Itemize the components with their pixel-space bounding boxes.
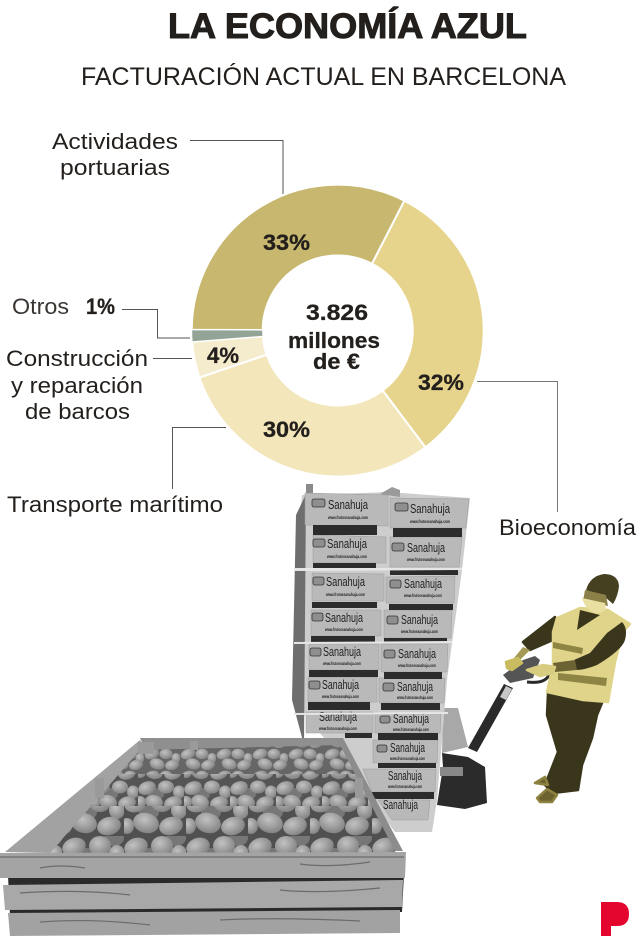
photo: stacked boxes: Sanahuja <box>404 576 443 591</box>
title: LA ECONOMÍA AZUL <box>168 6 527 46</box>
crate: corner posts <box>95 741 363 798</box>
photo: stacked boxes: www.frutossanahuja.com <box>396 695 433 700</box>
donut chart <box>192 185 484 477</box>
photo: stacked boxes: www.frutossanahuja.com <box>389 756 425 761</box>
crate: front plank top <box>0 852 406 878</box>
crate: right wall <box>336 738 403 851</box>
worker: left arm <box>523 617 555 650</box>
percentage labels <box>207 230 464 442</box>
photo: stacked boxes: Sanahuja <box>401 612 439 627</box>
photo: stacked boxes: www.frutossanahuja.com <box>397 663 436 668</box>
photo: wooden crate of potatoes <box>0 738 406 936</box>
photo: stacked boxes: Sanahuja <box>407 540 446 555</box>
worker: head <box>586 574 619 604</box>
photo: pallet truck <box>437 656 549 809</box>
percentage labels: 30% <box>263 417 310 442</box>
crate: front plank bottom <box>8 910 400 936</box>
worker: right arm <box>574 622 626 670</box>
segment: actividades portuarias 33% <box>192 185 404 330</box>
logo <box>601 902 629 936</box>
photo: stacked boxes: Sanahuja <box>325 610 364 625</box>
photo: stacked boxes: Sanahuja <box>326 574 366 589</box>
label: construcción y reparación de barcos: de barcos <box>25 399 130 424</box>
crate: wood marks <box>0 857 404 925</box>
worker: shoes <box>535 777 557 802</box>
donut centre total: de € <box>313 349 360 374</box>
photo: stacked boxes: www.frutossanahuja.com <box>322 661 361 666</box>
photo: stacked boxes: www.frutossanahuja.com <box>325 592 365 597</box>
label: actividades portuarias <box>52 129 178 180</box>
label: actividades portuarias: Actividades <box>52 129 178 154</box>
percentage labels: 33% <box>263 230 310 255</box>
segment: otros 1% <box>192 330 263 342</box>
worker: gloves <box>506 658 522 670</box>
label: otros: 1% <box>86 294 115 319</box>
photo: stacked boxes: www.frutossanahuja.com <box>392 727 429 732</box>
label: actividades portuarias: portuarias <box>60 155 170 180</box>
photo: stacked boxes: www.frutossanahuja.com <box>400 629 438 634</box>
crate: potatoes <box>50 744 400 854</box>
photo: stacked boxes: Sanahuja <box>388 768 422 783</box>
photo: stacked boxes: Sanahuja <box>410 501 451 516</box>
label: otros: Otros <box>12 294 69 319</box>
photo: stacked boxes: Sanahuja <box>393 711 429 726</box>
label: construcción y reparación de barcos <box>6 346 148 424</box>
label: construcción y reparación de barcos: y reparación <box>11 373 143 398</box>
crate: left wall <box>5 740 146 853</box>
segment: construcción 4% <box>192 336 267 378</box>
crate: inner back wall <box>140 738 346 751</box>
crate: dark gaps <box>8 874 404 916</box>
photo: stacked boxes: Sanahuja <box>328 497 369 512</box>
leader lines <box>122 140 558 512</box>
photo: stacked boxes: Sanahuja <box>383 797 418 812</box>
donut centre total: millones <box>288 328 380 353</box>
photo: stacked boxes: www.frutossanahuja.com <box>326 554 367 559</box>
photo: stacked boxes: Sanahuja <box>390 740 425 755</box>
photo: stacked boxes: Sanahuja <box>319 709 358 724</box>
photo: worker in high-visibility vest <box>506 574 630 802</box>
segment: transporte marítimo 30% <box>200 355 425 477</box>
label: bioeconomía: Bioeconomía <box>499 515 637 540</box>
photo: stacked boxes: www.frutossanahuja.com <box>403 593 442 598</box>
donut centre total: 3.826 <box>306 300 368 325</box>
label: otros <box>12 294 115 319</box>
label: transporte marítimo: Transporte marítimo <box>7 492 223 517</box>
segment: bioeconomía 32% <box>372 201 484 447</box>
photo: stacked boxes: www.frutossanahuja.com <box>409 519 450 524</box>
photo: stacked boxes: Sanahuja <box>323 644 362 659</box>
subtitle: FACTURACIÓN ACTUAL EN BARCELONA <box>81 62 566 91</box>
percentage labels: 4% <box>207 343 239 368</box>
photo: stacked boxes: www.frutossanahuja.com <box>324 627 363 632</box>
photo: stacked boxes <box>292 484 470 832</box>
photo: stacked boxes: www.frutossanahuja.com <box>406 557 445 562</box>
photo: stacked boxes: www.frutossanahuja.com <box>321 694 359 699</box>
photo: stacked boxes: Sanahuja <box>398 646 437 661</box>
worker: high-visibility vest <box>547 608 630 702</box>
crate: front plank middle <box>3 880 403 910</box>
photo: stacked boxes: www.frutossanahuja.com <box>327 515 368 520</box>
photo: stacked boxes: Sanahuja <box>322 677 360 692</box>
photo: stacked boxes: www.frutossanahuja.com <box>318 726 357 731</box>
photo: stacked boxes: www.frutossanahuja.com <box>387 784 422 789</box>
label: construcción y reparación de barcos: Construcción <box>6 346 148 371</box>
photo: stacked boxes: Sanahuja <box>397 679 433 694</box>
photo: stacked boxes: Sanahuja <box>327 536 368 551</box>
donut centre total <box>288 300 380 374</box>
worker: legs <box>545 693 602 793</box>
percentage labels: 32% <box>418 370 464 395</box>
